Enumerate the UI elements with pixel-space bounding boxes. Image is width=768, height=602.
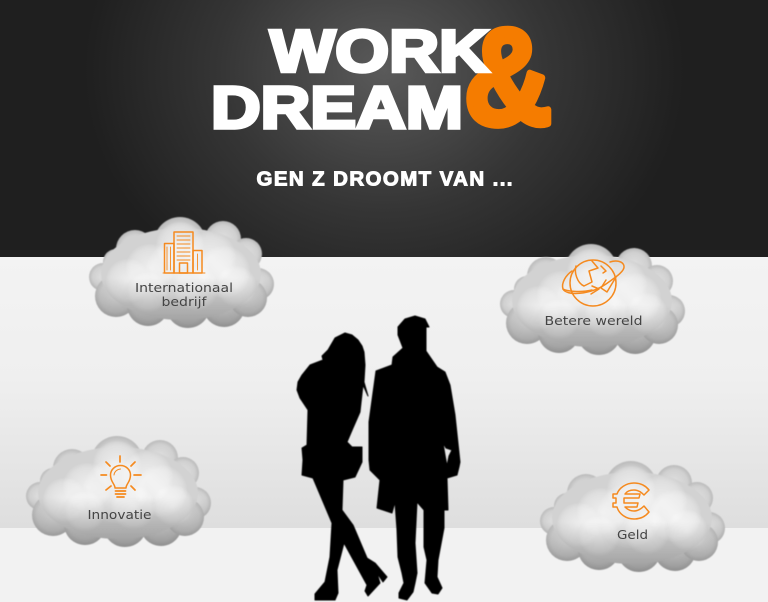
cloud: Innovatie [20, 436, 216, 555]
label: Innovatie [88, 507, 152, 522]
word: DREAM: DREAM [211, 75, 463, 141]
icon: office buildings [163, 232, 205, 273]
cloud: Internationaal bedrijf [83, 217, 279, 336]
cloud: Internationaal bedrijf: bedrijf [162, 294, 207, 309]
label: Internationaal [135, 280, 233, 295]
label: Geld [617, 527, 648, 542]
dark header background [0, 0, 768, 257]
title: Work & Dream logo [211, 1, 552, 154]
woman [297, 333, 387, 600]
label: Betere wereld [544, 313, 642, 328]
subtitle: GEN Z DROOMT VAN ... [256, 168, 512, 190]
silhouette: couple [297, 316, 460, 600]
cloud: Geld [534, 461, 730, 580]
wall background [0, 257, 768, 528]
icon: globe with ring and arrow [563, 260, 624, 306]
cloud: Betere wereld [494, 244, 690, 363]
word: WORK: WORK [270, 18, 489, 84]
floor [0, 528, 768, 602]
icon: euro sign [613, 483, 649, 519]
ampersand: & [464, 1, 552, 154]
man [369, 316, 460, 600]
icon: light bulb [101, 456, 141, 497]
